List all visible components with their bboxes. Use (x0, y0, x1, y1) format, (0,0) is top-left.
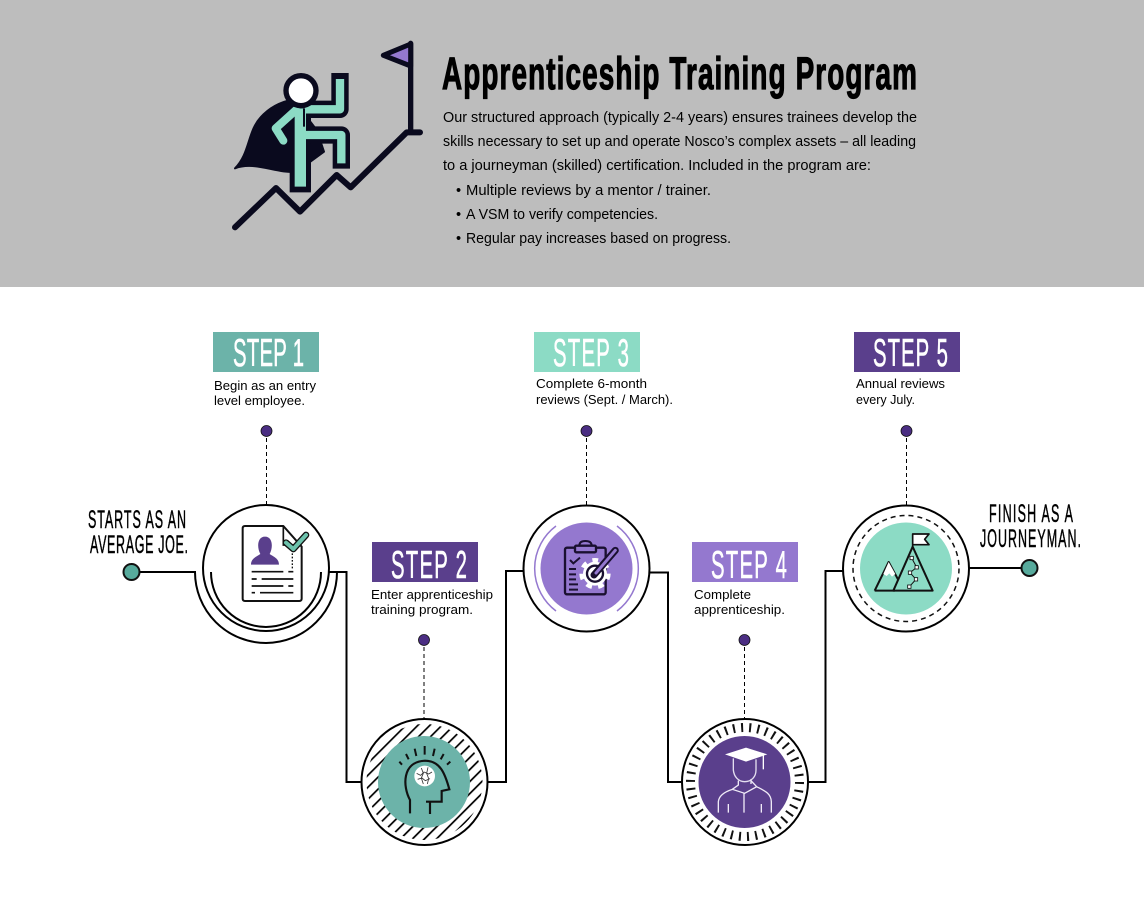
title: Apprenticeship Training Program (442, 48, 917, 99)
bullet list: program items (456, 183, 731, 247)
bullet list: program items: A VSM to verify competencies. (466, 207, 658, 223)
step 1 pin (261, 426, 272, 505)
step 1 block (195, 331, 337, 643)
start label (88, 506, 188, 559)
step 5 medallion (843, 506, 969, 632)
step 4 medallion (682, 719, 808, 845)
panel: header band (0, 0, 1144, 287)
finish label (980, 500, 1081, 553)
text block: introduction: to a journeyman (skilled) certification. Included in the program are: (443, 158, 871, 174)
step 1 badge: STEP 1 (233, 331, 304, 375)
step 5 description: every July. (856, 392, 915, 407)
step 4 description: Complete (694, 587, 751, 602)
step 3 badge: STEP 3 (553, 331, 629, 375)
icon: mountains with flag (875, 534, 933, 591)
step 2 description: Enter apprenticeship (371, 587, 493, 602)
step 1 description (214, 378, 316, 408)
icon: caped climber with flag (235, 43, 420, 227)
connector: step 3 to step 4 (649, 572, 682, 782)
icon: resume with check mark (243, 526, 306, 601)
step 3 medallion (524, 506, 650, 632)
step 2 description: training program. (371, 602, 473, 617)
icon: clipboard with gear and pencil (565, 541, 615, 594)
step 1 description: level employee. (214, 393, 305, 408)
text block: introduction: skills necessary to set up and operate Nosco’s complex assets – all leading (443, 134, 916, 150)
step 4 badge: STEP 4 (711, 543, 787, 587)
finish label: JOURNEYMAN. (980, 525, 1081, 553)
start label: STARTS AS AN (88, 506, 186, 534)
step 2 description (371, 587, 493, 617)
step 1 badge (213, 331, 319, 375)
step 3 description (536, 376, 673, 407)
bullet list: program items: Regular pay increases based on progress. (466, 231, 731, 247)
bullet list: program items: • (456, 183, 461, 199)
finish connector and dot (969, 560, 1038, 576)
icon: head with brain (399, 746, 450, 814)
text block: introduction: Our structured approach (typically 2-4 years) ensures trainees develop the (443, 110, 917, 126)
step 4 description (694, 587, 785, 617)
bullet list: program items: • (456, 231, 461, 247)
start label: AVERAGE JOE. (90, 531, 188, 559)
connector: step 4 to step 5 (808, 571, 844, 782)
icon: graduate (718, 748, 771, 813)
step 5 block (843, 331, 969, 632)
step 5 badge: STEP 5 (873, 331, 948, 375)
step 5 description: Annual reviews (856, 376, 945, 391)
step 3 description: reviews (Sept. / March). (536, 392, 673, 407)
step 5 description (856, 376, 945, 407)
connector: step 2 to step 3 (487, 571, 524, 782)
step 4 description: apprenticeship. (694, 602, 785, 617)
bullet list: program items: • (456, 207, 461, 223)
step 3 block (524, 331, 673, 632)
connector: step 1 to step 2 (320, 572, 362, 782)
text block: introduction (443, 110, 917, 174)
step 4 block (682, 542, 808, 845)
step 2 pin (418, 634, 430, 719)
finish label: FINISH AS A (989, 500, 1074, 528)
step 2 block (362, 542, 493, 845)
step 3 description: Complete 6-month (536, 376, 647, 391)
bullet list: program items: Multiple reviews by a mentor / trainer. (466, 183, 711, 199)
start connector and dot (124, 564, 196, 580)
step 4 pin (739, 634, 750, 719)
step 5 pin (901, 426, 912, 505)
step 2 medallion (362, 719, 488, 845)
step 1 description: Begin as an entry (214, 378, 316, 393)
step 1 medallion (195, 505, 337, 643)
step 2 badge: STEP 2 (391, 543, 467, 587)
step 3 pin (581, 426, 592, 506)
